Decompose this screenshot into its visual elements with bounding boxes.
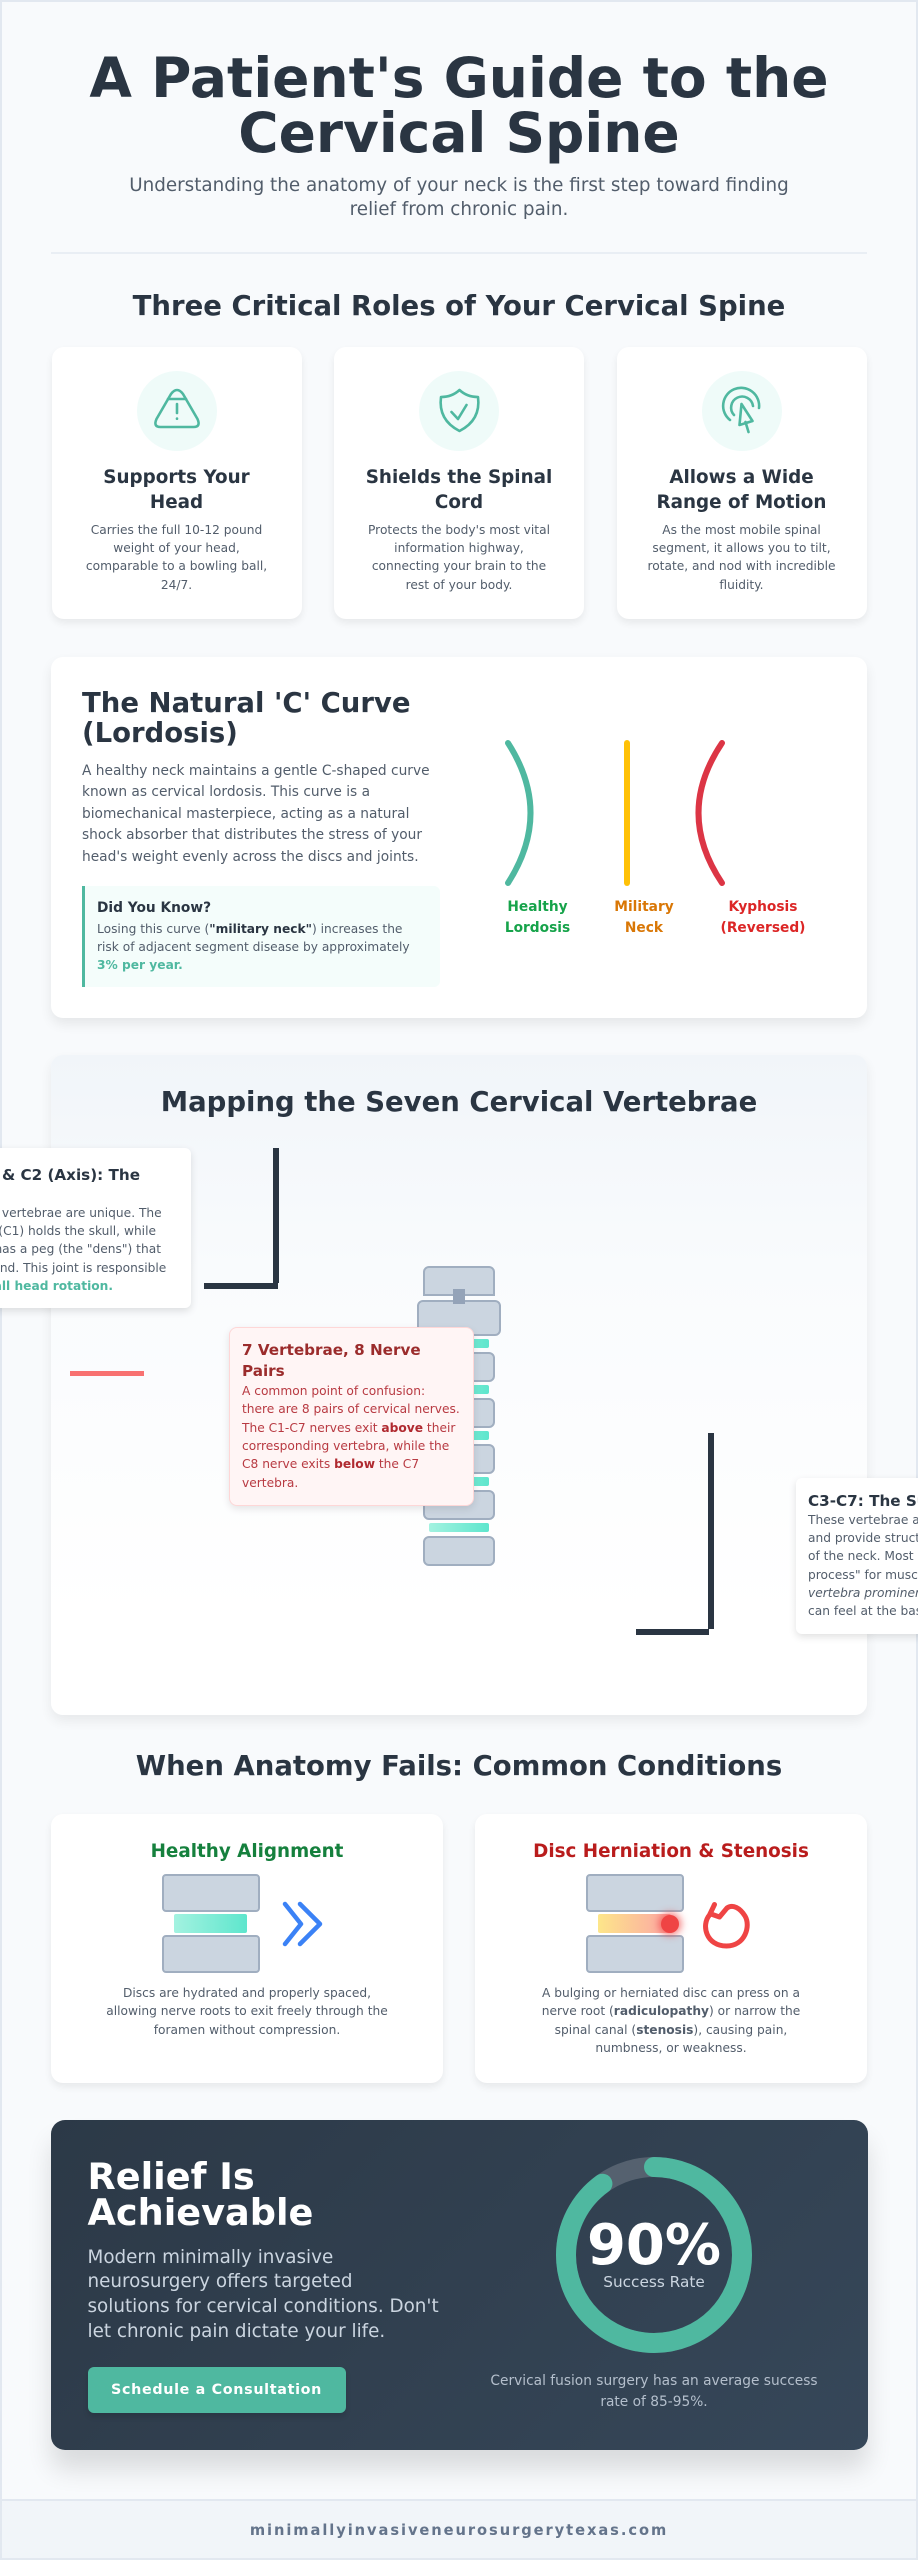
card text bbox=[368, 523, 550, 592]
panel heading: The Natural 'C' Curve bbox=[82, 687, 410, 719]
panel text: allowing nerve roots to exit freely through the bbox=[106, 2004, 388, 2018]
card text: rotate, and nod with incredible bbox=[647, 559, 836, 573]
diagram: cervical spine stack bbox=[417, 1266, 501, 1566]
header: title: A Patient's Guide to the bbox=[89, 46, 829, 110]
panel: healthy alignment bbox=[51, 1814, 443, 2083]
stat footnote: Cervical fusion surgery has an average success bbox=[490, 2373, 818, 2389]
callout text: Losing this curve ("military neck") increases the bbox=[97, 922, 402, 936]
diagram: lower vertebra bbox=[586, 1935, 684, 1973]
panel text: numbness, or weakness. bbox=[595, 2041, 747, 2055]
callout text: there are 8 pairs of cervical nerves. bbox=[242, 1402, 460, 1416]
disc 2 bbox=[428, 1385, 488, 1394]
panel body text: biomechanical masterpiece, acting as a natural bbox=[82, 806, 409, 822]
cta text bbox=[88, 2247, 439, 2342]
stat footnote bbox=[490, 2373, 818, 2410]
card text bbox=[647, 523, 836, 592]
card text: fluidity. bbox=[719, 578, 764, 592]
card text: connecting your brain to the bbox=[372, 559, 546, 573]
callout heading: Did You Know? bbox=[97, 900, 211, 916]
card text: Carries the full 10-12 pound bbox=[91, 523, 262, 537]
icon: double chevron bbox=[282, 1902, 322, 1946]
label: healthy lordosis: Healthy bbox=[507, 899, 568, 915]
card heading: Shields the Spinal bbox=[366, 467, 552, 488]
chart: neck curve comparison bbox=[505, 740, 725, 886]
card text: rest of your body. bbox=[406, 578, 512, 592]
callout: C3 to C7 bbox=[796, 1478, 918, 1634]
icon: pain ring bbox=[703, 1902, 750, 1948]
card text bbox=[86, 523, 267, 592]
card heading bbox=[366, 467, 552, 513]
panel heading: Disc Herniation & Stenosis bbox=[533, 1841, 809, 1862]
panel text: foramen without compression. bbox=[154, 2023, 340, 2037]
card text: 24/7. bbox=[161, 578, 192, 592]
curve: kyphosis bbox=[698, 743, 722, 883]
panel body text: known as cervical lordosis. This curve is a bbox=[82, 784, 370, 800]
vertebra C2 bbox=[416, 1300, 500, 1336]
header: subtitle: relief from chronic pain. bbox=[350, 199, 568, 220]
cta text: Modern minimally invasive bbox=[88, 2247, 333, 2268]
cta heading bbox=[88, 2154, 313, 2234]
cta button bbox=[88, 2366, 346, 2412]
disc 3 bbox=[428, 1431, 488, 1440]
callout: 7 vertebrae 8 nerve pairs bbox=[229, 1326, 474, 1506]
callout text: corresponding vertebra, while the bbox=[242, 1439, 449, 1453]
section heading: common conditions: When Anatomy Fails: Common Conditions bbox=[136, 1750, 782, 1782]
stat label: Success Rate bbox=[603, 2273, 705, 2291]
panel text: spinal canal (stenosis), causing pain, bbox=[555, 2023, 787, 2037]
label: kyphosis: Kyphosis bbox=[729, 899, 797, 915]
panel: supports your head bbox=[52, 347, 302, 619]
cta heading: Relief Is bbox=[88, 2154, 255, 2198]
callout text bbox=[242, 1384, 460, 1490]
icon: shield check bbox=[419, 371, 499, 451]
callout text: 3% per year. bbox=[97, 958, 183, 972]
card text: segment, it allows you to tilt, bbox=[652, 541, 831, 555]
cta heading: Achievable bbox=[88, 2191, 313, 2234]
panel: range of motion bbox=[616, 347, 866, 619]
callout heading bbox=[242, 1340, 421, 1380]
card text: As the most mobile spinal bbox=[662, 523, 821, 537]
panel heading: Healthy Alignment bbox=[151, 1841, 343, 1862]
card heading: Supports Your bbox=[103, 467, 250, 488]
label: military neck: Military bbox=[614, 899, 674, 915]
panel body text: shock absorber that distributes the stress of your bbox=[82, 827, 422, 843]
callout text: risk of adjacent segment disease by approximately bbox=[97, 940, 410, 954]
card heading bbox=[103, 467, 250, 513]
panel heading bbox=[82, 687, 410, 749]
panel: shields the spinal cord bbox=[334, 347, 584, 619]
panel: call to action bbox=[50, 2120, 868, 2450]
label: military neck bbox=[614, 899, 674, 936]
panel: disc herniation and stenosis bbox=[475, 1814, 867, 2083]
curve: healthy lordosis bbox=[508, 743, 530, 883]
card heading: Cord bbox=[435, 492, 483, 513]
panel text bbox=[106, 1986, 388, 2037]
callout text bbox=[97, 922, 410, 972]
cta text: neurosurgery offers targeted bbox=[88, 2271, 353, 2292]
cta text: let chronic pain dictate your life. bbox=[88, 2321, 385, 2342]
section heading: three critical roles: Three Critical Roles of Your Cervical Spine bbox=[133, 290, 785, 322]
card heading bbox=[657, 467, 826, 513]
card text: weight of your head, bbox=[113, 541, 240, 555]
disc 4 bbox=[428, 1477, 488, 1486]
label: kyphosis bbox=[721, 899, 805, 936]
curve: military neck bbox=[624, 743, 630, 883]
callout text: C8 nerve exits below the C7 bbox=[242, 1457, 419, 1471]
panel text: nerve root (radiculopathy) or narrow the bbox=[542, 2004, 800, 2018]
dens peg bbox=[452, 1289, 464, 1304]
callout text bbox=[808, 1513, 918, 1618]
panel body text bbox=[82, 763, 430, 865]
stat: 90 percent: 90% bbox=[587, 2213, 721, 2278]
callout heading: 7 Vertebrae, 8 Nerve bbox=[242, 1340, 421, 1358]
stat footnote: rate of 85-95%. bbox=[600, 2394, 708, 2410]
diagram: lower vertebra bbox=[162, 1935, 260, 1973]
card heading: Head bbox=[150, 492, 203, 513]
disc 1 bbox=[428, 1339, 488, 1348]
card heading: Allows a Wide bbox=[669, 467, 814, 488]
callout text: A common point of confusion: bbox=[242, 1384, 425, 1398]
cta button: Schedule a Consultation bbox=[111, 2382, 322, 2398]
panel: mapping the vertebrae bbox=[51, 1055, 867, 1715]
section heading: mapping: Mapping the Seven Cervical Vertebrae bbox=[161, 1086, 757, 1118]
card text: information highway, bbox=[394, 541, 524, 555]
panel body text: head's weight evenly across the discs and joints. bbox=[82, 849, 419, 865]
icon: alert triangle bbox=[136, 371, 216, 451]
disc 5 bbox=[428, 1523, 488, 1532]
footer bbox=[2, 2499, 916, 2558]
vertebra C7 bbox=[422, 1536, 494, 1566]
card heading: Range of Motion bbox=[657, 492, 826, 513]
vertebra C3 bbox=[422, 1352, 494, 1382]
connector: red accent line bbox=[70, 1371, 144, 1376]
diagram: herniated disc bbox=[598, 1914, 670, 1933]
panel body text: A healthy neck maintains a gentle C-shaped curve bbox=[82, 763, 430, 779]
header: subtitle bbox=[129, 174, 789, 220]
vertebra C6 bbox=[422, 1490, 494, 1520]
callout: C1 and C2 bbox=[0, 1148, 191, 1308]
callout text: The C1-C7 nerves exit above their bbox=[242, 1421, 455, 1435]
diagram: healthy disc bbox=[174, 1914, 247, 1933]
card text: comparable to a bowling ball, bbox=[86, 559, 267, 573]
callout text: vertebra. bbox=[242, 1476, 298, 1490]
label: healthy lordosis: Lordosis bbox=[505, 920, 570, 936]
vertebra C1 bbox=[422, 1266, 494, 1296]
donut chart: success rate bbox=[556, 2157, 752, 2353]
header: title: Cervical Spine bbox=[238, 100, 680, 164]
label: healthy lordosis bbox=[505, 899, 570, 936]
callout: did you know bbox=[82, 886, 440, 987]
cta text: solutions for cervical conditions. Don't bbox=[88, 2296, 439, 2317]
panel text: Discs are hydrated and properly spaced, bbox=[123, 1986, 371, 2000]
connector: right elbow bbox=[636, 1433, 714, 1635]
diagram: upper vertebra bbox=[586, 1874, 684, 1912]
diagram: herniation bulge bbox=[661, 1914, 679, 1932]
panel: natural C curve bbox=[51, 657, 867, 1018]
header: subtitle: Understanding the anatomy of your neck is the first step toward finding bbox=[129, 174, 789, 196]
card text: Protects the body's most vital bbox=[368, 523, 550, 537]
vertebra C4 bbox=[422, 1398, 494, 1428]
panel text: A bulging or herniated disc can press on a bbox=[542, 1986, 800, 2000]
label: military neck: Neck bbox=[625, 920, 663, 936]
connector: left elbow bbox=[204, 1148, 279, 1289]
callout text bbox=[0, 1206, 166, 1293]
callout heading: Pairs bbox=[242, 1362, 285, 1380]
footer website: minimallyinvasiveneurosurgerytexas.com bbox=[250, 2522, 668, 2538]
label: kyphosis: (Reversed) bbox=[721, 920, 805, 936]
vertebra C5 bbox=[422, 1444, 494, 1474]
panel heading: (Lordosis) bbox=[82, 717, 238, 749]
header: title bbox=[89, 46, 829, 164]
icon: touch pointer bbox=[702, 371, 782, 451]
diagram: upper vertebra bbox=[162, 1874, 260, 1912]
panel text bbox=[542, 1986, 800, 2055]
